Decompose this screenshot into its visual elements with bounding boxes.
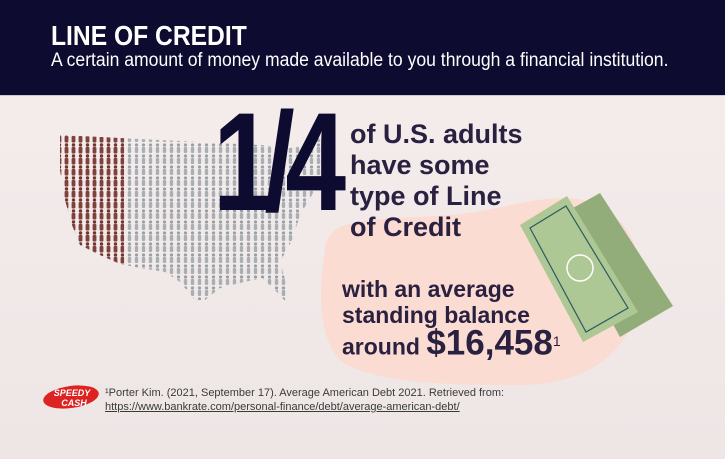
subtitle: A certain amount of money made available to you through a financial institution. bbox=[51, 50, 668, 71]
statistic text: type of Line bbox=[350, 181, 502, 211]
logo: speedy cash bbox=[43, 385, 99, 409]
citation bbox=[105, 387, 504, 413]
balance text: with an average bbox=[342, 276, 515, 302]
header bbox=[0, 0, 725, 96]
title: LINE OF CREDIT bbox=[51, 20, 247, 51]
statistic text bbox=[350, 119, 523, 242]
statistic text: of Credit bbox=[350, 212, 461, 242]
logo: speedy cash: CASH bbox=[61, 398, 87, 408]
fraction 1/4: 1/4 bbox=[213, 83, 337, 240]
citation: https://www.bankrate.com/personal-finance/debt/average-american-debt/ bbox=[105, 401, 460, 413]
balance text bbox=[342, 276, 561, 363]
statistic text: have some bbox=[350, 150, 490, 180]
balance text: standing balance bbox=[342, 302, 530, 328]
US map of people bbox=[60, 135, 320, 300]
citation: ¹Porter Kim. (2021, September 17). Average American Debt 2021. Retrieved from: bbox=[105, 387, 504, 399]
logo: speedy cash: SPEEDY bbox=[54, 388, 91, 398]
balance text: around $16,4581 bbox=[342, 324, 561, 363]
statistic text: of U.S. adults bbox=[350, 119, 523, 149]
